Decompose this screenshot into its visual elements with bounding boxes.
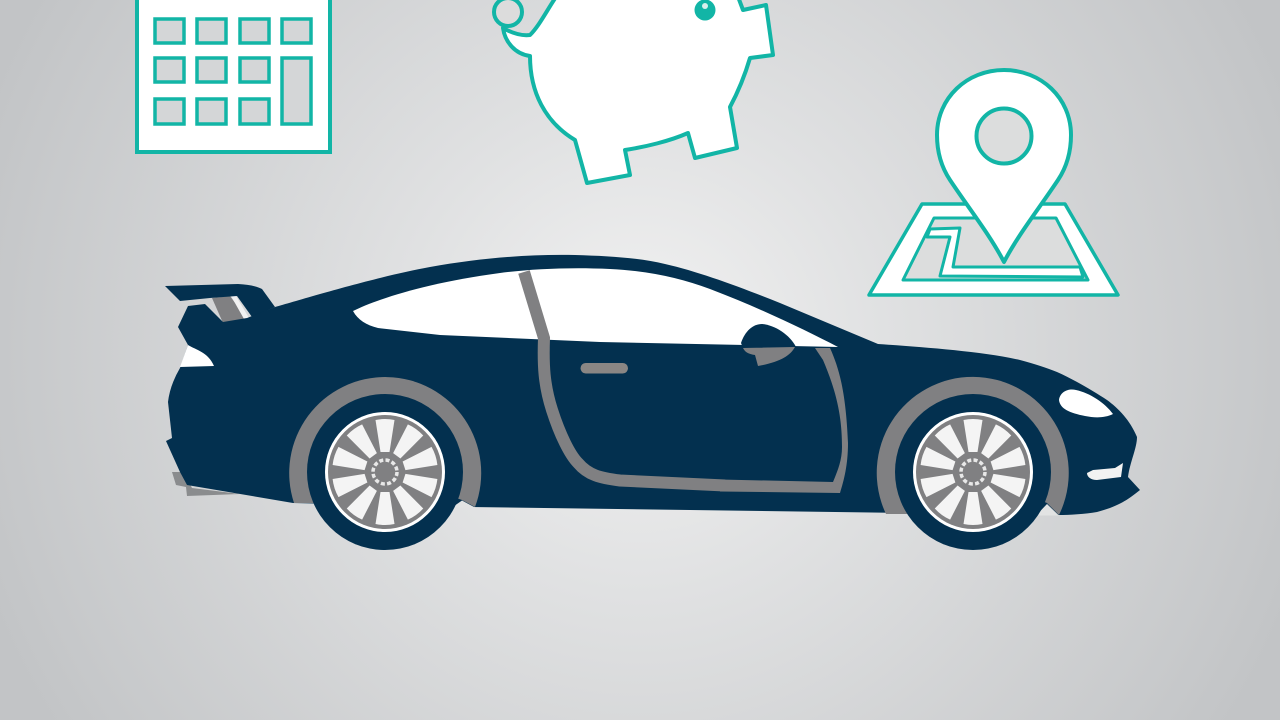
- rear arch notch: [452, 500, 475, 508]
- spoiler wing: [165, 284, 275, 317]
- map route: [927, 228, 1083, 277]
- headlight: [1059, 389, 1113, 417]
- front wheel: [895, 394, 1051, 550]
- icon: calendar: [137, 0, 330, 152]
- rear light: [180, 345, 214, 367]
- front arch notch: [1036, 504, 1059, 516]
- wing mirror: [741, 324, 796, 366]
- rear undertray: [172, 472, 240, 496]
- door shut line: [524, 272, 725, 486]
- door handle: [580, 363, 628, 374]
- icon: piggy bank: [494, 0, 773, 183]
- spoiler strut: [212, 296, 247, 323]
- map inner area: [903, 218, 1088, 280]
- front vent: [1087, 463, 1123, 480]
- eye: [694, 0, 716, 20]
- front wheel arch: [877, 377, 1069, 515]
- car body: [166, 255, 1140, 515]
- coin: [494, 0, 522, 26]
- car: [165, 255, 1140, 550]
- pin: [937, 70, 1071, 262]
- spoiler stripe: [231, 296, 249, 319]
- rear wheel arch: [289, 377, 481, 507]
- icon: map pin on map: [869, 70, 1118, 295]
- map sheet: [869, 204, 1118, 295]
- window: [353, 268, 838, 347]
- rear wheel: [307, 394, 463, 550]
- pin hole: [976, 108, 1032, 164]
- door front edge: [720, 348, 848, 493]
